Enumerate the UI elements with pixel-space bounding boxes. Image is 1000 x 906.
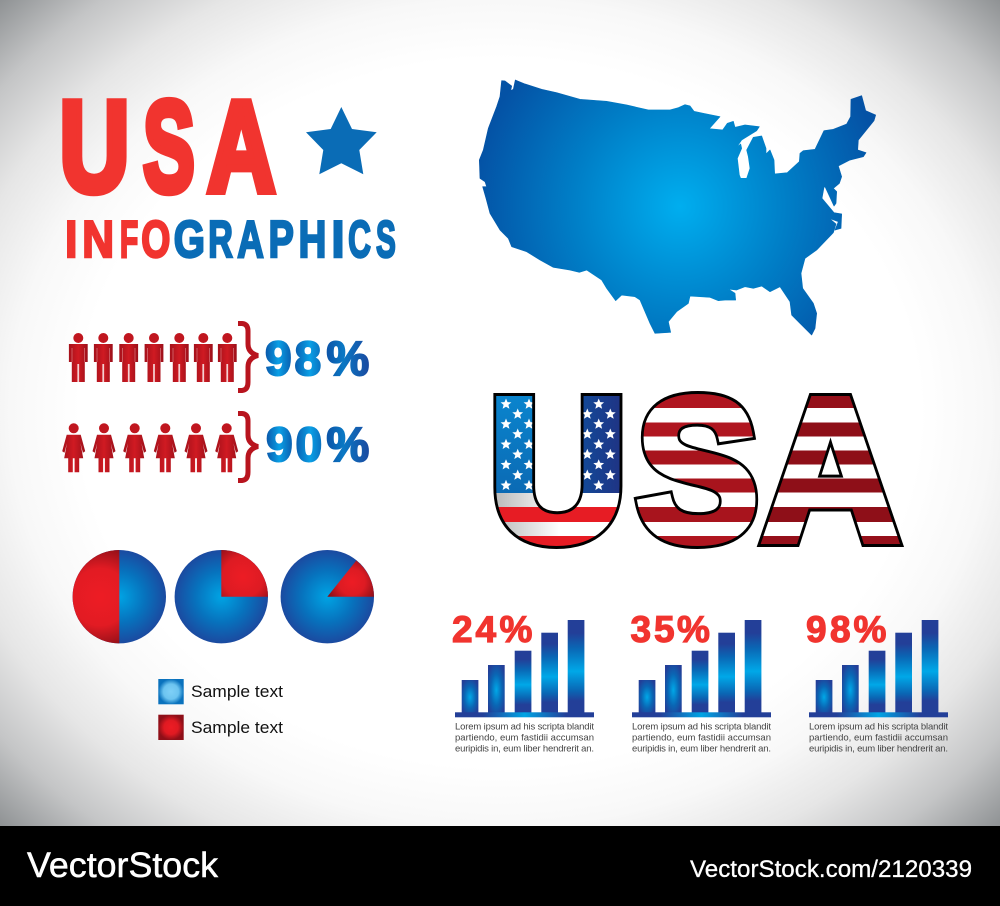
subtitle: INFOGRAPHICS: P [269, 211, 294, 269]
subtitle: INFOGRAPHICS: H [299, 211, 326, 269]
subtitle: INFOGRAPHICS: I [332, 211, 345, 269]
value: 35%: 35% [630, 609, 710, 650]
flag letter U: U [489, 356, 627, 582]
value: 98%: 98% [265, 333, 369, 386]
subtitle: INFOGRAPHICS: G [174, 211, 205, 269]
map of the USA [479, 80, 876, 335]
subtitle: INFOGRAPHICS: N [82, 211, 114, 269]
icon: star [306, 107, 377, 174]
pie chart: half [73, 550, 166, 643]
pie chart: wedge [281, 550, 374, 643]
bar chart: 35% [630, 609, 771, 755]
caption: euripidis in, eum liber hendrerit an. [455, 744, 594, 755]
subtitle: INFOGRAPHICS: S [376, 211, 396, 269]
caption: Lorem ipsum ad his scripta blandit [632, 722, 771, 733]
subtitle: INFOGRAPHICS: F [120, 211, 138, 269]
caption: partiendo, eum fastidii accumsan [455, 733, 594, 744]
footer url: VectorStock.com/2120339 [690, 856, 972, 883]
flag letter S: S [636, 356, 758, 582]
title: USA: A [207, 75, 275, 219]
title: USA [60, 75, 275, 219]
brace: men [238, 324, 258, 390]
subtitle: INFOGRAPHICS: A [237, 211, 264, 269]
flag letter A: A [762, 356, 899, 582]
value: 90%: 90% [266, 419, 369, 472]
subtitle: INFOGRAPHICS [65, 211, 396, 269]
men pictogram row [69, 333, 237, 382]
footer bar [0, 826, 1000, 906]
flag lettering: USA [489, 356, 899, 582]
caption: Lorem ipsum ad his scripta blandit [809, 722, 948, 733]
caption [632, 722, 771, 755]
footer brand: VectorStock [27, 846, 219, 885]
subtitle: INFOGRAPHICS: C [348, 211, 371, 269]
title: USA: S [143, 75, 195, 219]
legend swatch: blue [158, 679, 184, 704]
caption: euripidis in, eum liber hendrerit an. [632, 744, 771, 755]
legend label: red: Sample text [191, 718, 283, 737]
flag letter S: S [636, 356, 758, 582]
women pictogram row [62, 423, 238, 472]
bar chart: 98% [806, 609, 948, 755]
brace: women [238, 414, 258, 480]
legend [158, 679, 283, 740]
caption: partiendo, eum fastidii accumsan [809, 733, 948, 744]
caption [809, 722, 948, 755]
caption: Lorem ipsum ad his scripta blandit [455, 722, 594, 733]
value: 98%: 98% [806, 609, 886, 650]
legend label: blue: Sample text [191, 682, 283, 701]
subtitle: INFOGRAPHICS: R [208, 211, 233, 269]
caption: euripidis in, eum liber hendrerit an. [809, 744, 948, 755]
legend swatch: red [158, 715, 184, 740]
flag letter U: U [489, 356, 627, 582]
title: USA: U [60, 75, 130, 219]
bar chart: 24% [452, 609, 594, 755]
caption [455, 722, 594, 755]
pie chart: quarter [175, 550, 268, 643]
value: 24%: 24% [452, 609, 532, 650]
subtitle: INFOGRAPHICS: O [141, 211, 170, 269]
subtitle: INFOGRAPHICS: I [65, 211, 77, 269]
flag letter A: A [762, 356, 899, 582]
caption: partiendo, eum fastidii accumsan [632, 733, 771, 744]
